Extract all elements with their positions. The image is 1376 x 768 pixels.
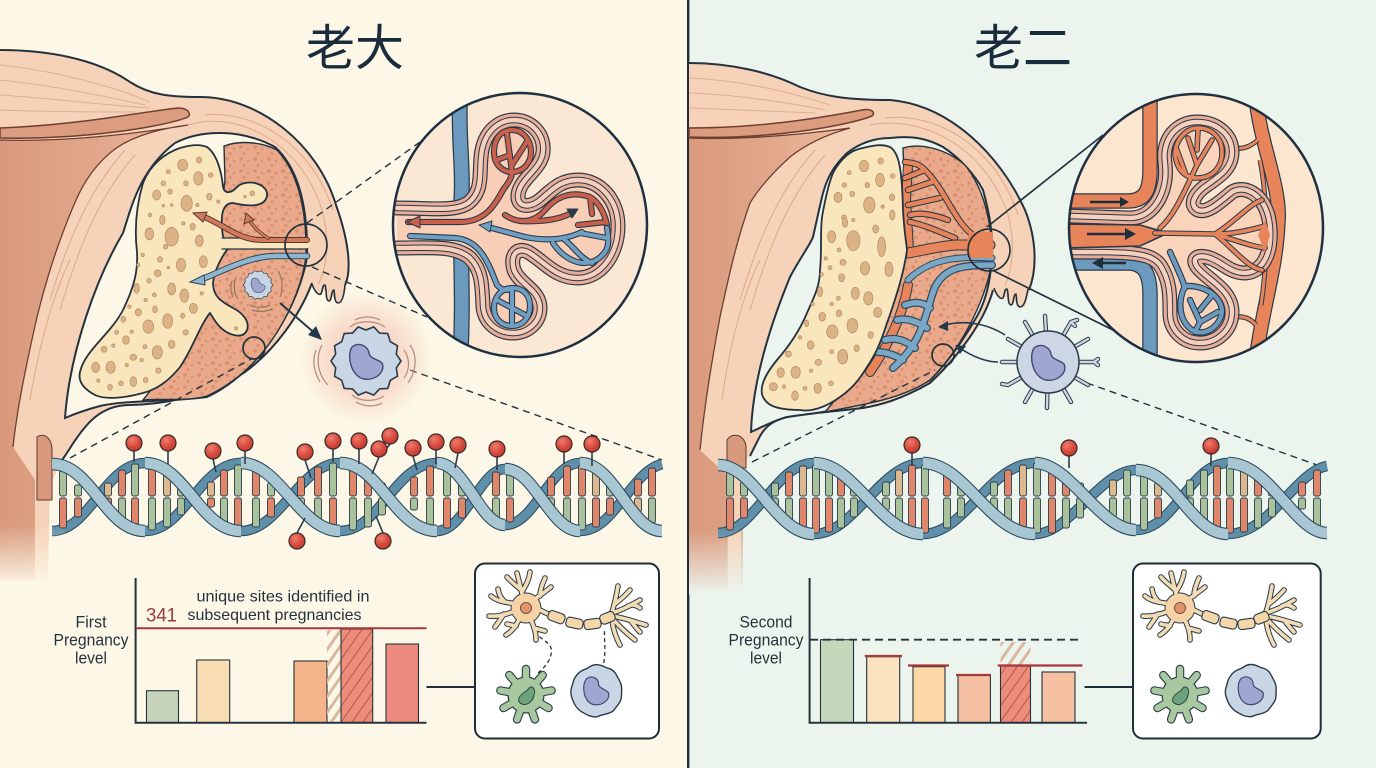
central divider (687, 0, 689, 768)
placental vessels right (870, 162, 992, 372)
lens circles left (243, 224, 327, 359)
placenta body left (80, 145, 267, 398)
connector to cell box left (426, 686, 476, 688)
bar chart right (728, 578, 1087, 723)
fade at cervix left (0, 525, 65, 587)
placenta body right (762, 145, 907, 410)
chart axes left (136, 578, 426, 723)
base pairs left (60, 463, 656, 531)
cell arrows right (938, 321, 1005, 362)
cell box right (1133, 564, 1321, 738)
magnified villi right (1066, 94, 1323, 365)
microglia right (1154, 669, 1206, 719)
uterus wall right (689, 63, 1035, 595)
fimbriae left (312, 284, 345, 303)
bars left (146, 629, 418, 723)
fade at cervix right (689, 530, 754, 595)
vessels left (200, 216, 307, 280)
small immune cell left (231, 271, 282, 311)
hatched ghost bar (1000, 642, 1030, 666)
bar chart left (54, 578, 426, 723)
uterus wall left (0, 50, 349, 580)
immune cell right (1002, 316, 1098, 408)
second pregnancy dashed level (810, 639, 1082, 641)
base pairs right (726, 463, 1320, 533)
glow behind activated cell (300, 292, 432, 424)
lymphocyte left (571, 665, 622, 717)
red level caps (865, 656, 1082, 675)
axis label right: level (750, 650, 782, 668)
left panel background (0, 0, 687, 768)
DNA helix right (718, 463, 1327, 534)
annotation text: unique sites identified in (196, 588, 370, 606)
placenta spots right (769, 158, 895, 400)
dashed links left (538, 630, 605, 673)
first pregnancy threshold line (136, 627, 426, 629)
fimbriae right (994, 288, 1028, 307)
axis label left (54, 614, 129, 668)
placenta capsule left (65, 133, 307, 418)
microglia left (500, 669, 552, 719)
chart axes right (810, 578, 1087, 723)
axis label left: level (75, 650, 107, 668)
annotation text (188, 588, 370, 624)
vessel arrowheads left (190, 212, 254, 285)
methylation marks left (126, 428, 600, 549)
title: first child: 老大 (306, 22, 404, 76)
neuron right (1143, 572, 1300, 645)
axis label left: First (76, 614, 107, 632)
DNA helix left (52, 463, 662, 531)
methylation marks right (904, 437, 1219, 468)
magnified villi left (393, 93, 647, 365)
arrow to activated cell (280, 303, 322, 340)
right panel background (689, 0, 1376, 768)
connector to cell box right (1084, 686, 1133, 688)
decidua left (143, 143, 306, 400)
decidua right (825, 146, 992, 412)
panel: first pregnancy (0, 22, 662, 738)
neuron left (489, 572, 646, 645)
placenta spots left (92, 157, 255, 390)
placenta capsule right (751, 137, 992, 432)
lymphocyte right (1225, 664, 1276, 717)
panel: second pregnancy (689, 22, 1327, 738)
callout lines right (987, 135, 1145, 350)
zoom source lens right (932, 229, 1010, 366)
number 341: 341 (146, 606, 177, 626)
dashed callout lines left (70, 137, 662, 460)
annotation text: subsequent pregnancies (188, 607, 362, 624)
cell box left (475, 564, 659, 738)
title: second child: 老二 (974, 22, 1072, 76)
dashed callout lines right (752, 370, 1317, 465)
axis label right: Pregnancy (728, 632, 804, 650)
axis label left: Pregnancy (54, 632, 129, 650)
bars right (820, 640, 1075, 723)
axis label right: Second (740, 614, 792, 632)
activated immune cell left (314, 317, 415, 406)
axis label right (728, 614, 804, 668)
